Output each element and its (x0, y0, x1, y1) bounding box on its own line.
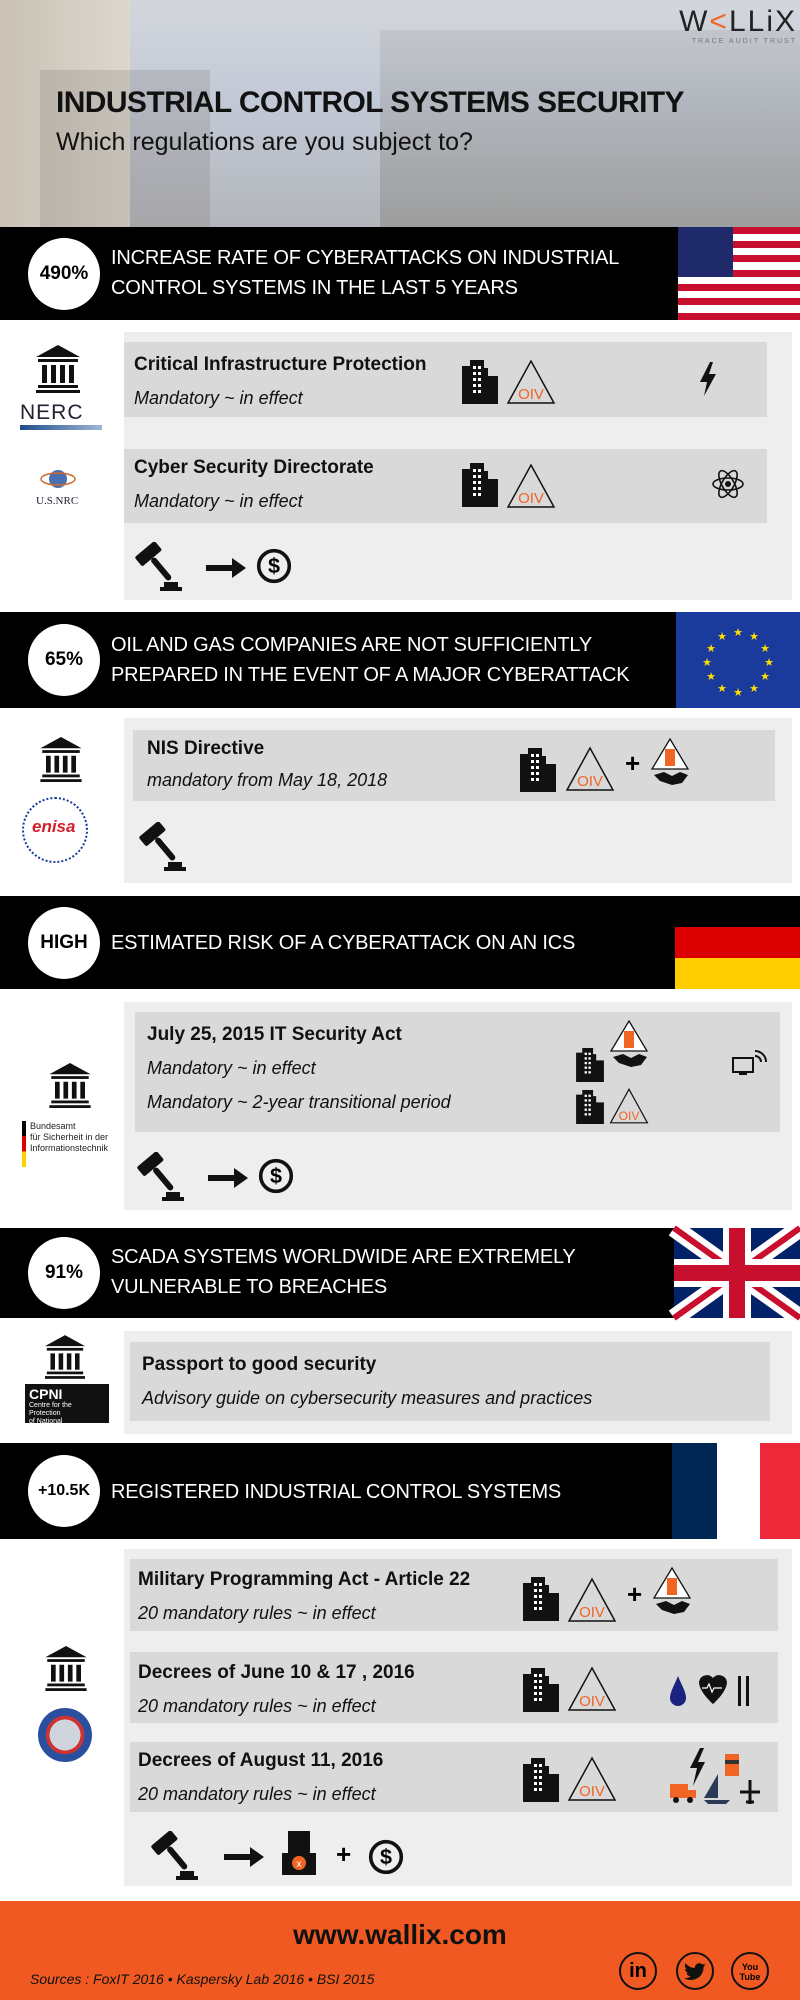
row: Decrees of August 11: OIV (579, 1783, 605, 1800)
footer: sources: Sources : FoxIT 2016 • Kaspersky Lab 2016 • BSI 2015 (30, 1971, 374, 1987)
row: NIS Directive: + (625, 748, 640, 778)
row: IT Security Act: OIV (619, 1109, 639, 1123)
row: Military Programming Act: OIV (579, 1604, 605, 1621)
footer: social icons: Tube (740, 1972, 760, 1982)
panel: France regulations (124, 1549, 792, 1886)
banner: EU: 65% (45, 649, 83, 670)
flag: EU: ★ (760, 670, 770, 683)
penalty: gavel to fine (135, 542, 292, 591)
flag: EU (676, 612, 800, 708)
row: Decrees of June 10 & 17: 20 mandatory rules ~ in effect (138, 1696, 376, 1716)
subtitle: Which regulations are you subject to? (56, 128, 473, 156)
logo: WALLIX: W<LLiX (679, 5, 797, 38)
flag: USA (678, 227, 800, 320)
row: Military Programming Act: 20 mandatory rules ~ in effect (138, 1603, 376, 1623)
flag: Germany (675, 927, 800, 989)
banner: EU: OIL AND GAS COMPANIES ARE NOT SUFFICIENTLY (111, 634, 592, 656)
banner: Germany: HIGH (40, 932, 88, 953)
flag: EU: ★ (764, 656, 774, 669)
row: Decrees of June 10 & 17 (130, 1652, 778, 1723)
panel: EU regulations (124, 718, 792, 883)
row: IT Security Act: Mandatory ~ 2-year transitional period (147, 1092, 451, 1112)
row: Cyber Security Directorate: Cyber Security Directorate (134, 457, 374, 478)
logos: BSI (22, 1063, 108, 1167)
banner: USA: CONTROL SYSTEMS IN THE LAST 5 YEARS (111, 277, 518, 299)
row: NIS Directive: OIV (577, 773, 603, 790)
logos: CPNI: Centre for the Protection (29, 1402, 72, 1417)
logos: ENISA: enisa (32, 817, 75, 836)
banner: Germany: ESTIMATED RISK OF A CYBERATTACK ON AN ICS (111, 932, 575, 954)
row: Decrees of August 11: Decrees of August 11, 2016 (138, 1750, 383, 1771)
row: Military Programming Act: Military Programming Act - Article 22 (138, 1569, 470, 1590)
logos: CPNI: CPNI (29, 1386, 62, 1402)
logos: NERC / USNRC: U.S.NRC (36, 495, 78, 507)
logos: BSI: Bundesamt (30, 1121, 76, 1131)
logos: CPNI (25, 1335, 109, 1423)
row: Decrees of June 10 & 17: OIV (579, 1693, 605, 1710)
penalty: gavel to closure plus fine: x (296, 1859, 302, 1870)
row: Critical Infrastructure Protection: Critical Infrastructure Protection (134, 354, 426, 375)
banner: France (0, 1443, 800, 1539)
title: INDUSTRIAL CONTROL SYSTEMS SECURITY (56, 86, 684, 119)
row: Passport to good security: Advisory guide on cybersecurity measures and practices (142, 1388, 592, 1408)
banner: USA: INCREASE RATE OF CYBERATTACKS ON INDUSTRIAL (111, 247, 619, 269)
flag: EU: ★ (706, 670, 716, 683)
row: Cyber Security Directorate (124, 449, 767, 523)
penalty: gavel to closure plus fine (151, 1831, 404, 1880)
row: NIS Directive: mandatory from May 18, 2018 (147, 770, 387, 790)
logo: WALLIX: TRACE AUDIT TRUST (692, 38, 797, 45)
banner: EU (0, 612, 800, 708)
panel: Germany regulations (124, 1002, 792, 1210)
row: IT Security Act: Mandatory ~ in effect (147, 1058, 316, 1078)
banner: USA: 490% (40, 263, 88, 284)
flag: EU: ★ (717, 630, 727, 643)
banner: Germany (0, 896, 800, 989)
flag: UK (668, 1226, 800, 1320)
row: Critical Infrastructure Protection (124, 342, 767, 417)
row: IT Security Act: July 25, 2015 IT Security Act (147, 1024, 402, 1045)
flag: France (672, 1443, 800, 1539)
footer: social icons (619, 1952, 769, 1990)
logos: NERC / USNRC (20, 345, 102, 507)
row: IT Security Act (135, 1012, 780, 1132)
flag: EU: ★ (749, 630, 759, 643)
row: Decrees of June 10 & 17: Decrees of June 10 & 17 , 2016 (138, 1662, 415, 1683)
flag: EU: ★ (733, 626, 743, 639)
row: Decrees of August 11: 20 mandatory rules ~ in effect (138, 1784, 376, 1804)
footer: social icons: You (742, 1962, 758, 1972)
row: NIS Directive: NIS Directive (147, 738, 264, 759)
banner: UK: SCADA SYSTEMS WORLDWIDE ARE EXTREMELY (111, 1246, 576, 1268)
banner: France: REGISTERED INDUSTRIAL CONTROL SYSTEMS (111, 1481, 561, 1503)
row: Decrees of August 11 (130, 1742, 778, 1812)
row: NIS Directive (133, 730, 775, 801)
logos: BSI: Informationstechnik (30, 1143, 108, 1153)
panel: USA regulations (124, 332, 792, 600)
penalty: gavel to fine (137, 1152, 294, 1201)
row: Passport to good security (130, 1342, 770, 1421)
footer (0, 1901, 800, 2000)
row: Passport to good security: Passport to good security (142, 1354, 376, 1375)
flag: EU: ★ (760, 642, 770, 655)
row: Cyber Security Directorate: Mandatory ~ in effect (134, 491, 303, 511)
footer: social icons: in (629, 1960, 647, 1982)
header image background (0, 0, 800, 227)
penalty: gavel (139, 822, 186, 871)
footer: url: www.wallix.com (293, 1919, 507, 1950)
panel: UK regulations (124, 1331, 792, 1434)
row: Critical Infrastructure Protection: OIV (518, 386, 544, 403)
row: Critical Infrastructure Protection: Mandatory ~ in effect (134, 388, 303, 408)
logos: BSI: für Sicherheit in der (30, 1132, 108, 1142)
flag: EU: ★ (702, 656, 712, 669)
banner: France: +10.5K (38, 1482, 90, 1499)
logos: ANSSI (38, 1646, 92, 1762)
banner: UK (0, 1228, 800, 1318)
flag: EU: ★ (749, 682, 759, 695)
banner: UK: VULNERABLE TO BREACHES (111, 1276, 387, 1298)
banner: EU: PREPARED IN THE EVENT OF A MAJOR CYBERATTACK (111, 664, 629, 686)
banner: USA (0, 227, 800, 320)
logos: ENISA (22, 737, 88, 863)
banner: UK: 91% (45, 1262, 83, 1283)
flag: EU: ★ (733, 686, 743, 699)
flag: EU: ★ (717, 682, 727, 695)
row: Military Programming Act: + (627, 1579, 642, 1609)
row: Military Programming Act (130, 1559, 778, 1631)
logos: NERC / USNRC: NERC (20, 401, 84, 424)
row: Cyber Security Directorate: OIV (518, 490, 544, 507)
flag: EU: ★ (706, 642, 716, 655)
penalty: gavel to closure plus fine: + (336, 1839, 351, 1869)
